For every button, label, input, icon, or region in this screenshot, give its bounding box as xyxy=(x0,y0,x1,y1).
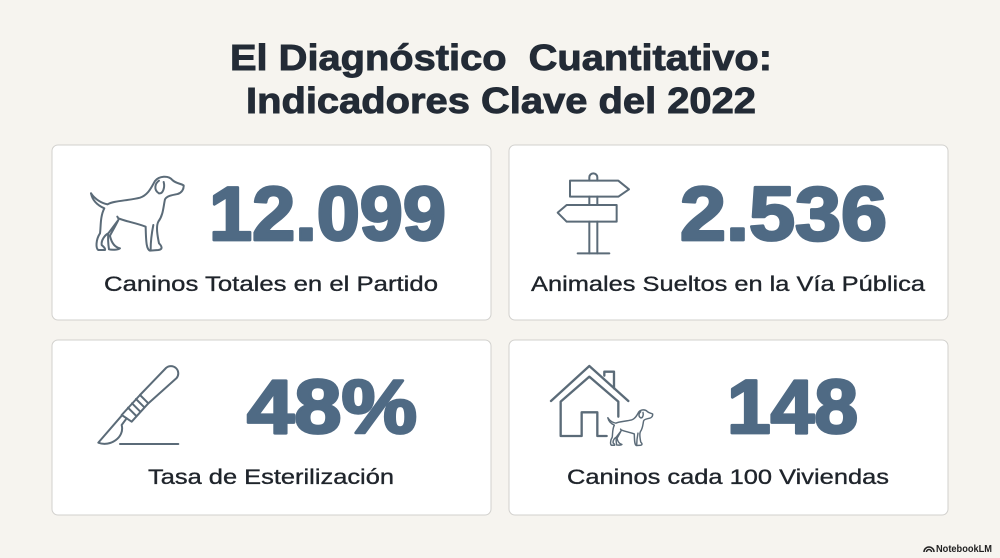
number: 12.099: 12.099 xyxy=(209,172,446,257)
panel: animales sueltos xyxy=(509,145,948,320)
title: El Diagnóstico Cuantitativo: xyxy=(230,37,772,78)
icon: small dog xyxy=(608,410,653,446)
label: Caninos Totales en el Partido xyxy=(104,272,438,296)
icon: dog xyxy=(91,177,184,251)
panel: caninos totales xyxy=(52,145,491,320)
icon: signpost xyxy=(558,173,629,253)
number: 48%: 48% xyxy=(247,365,417,450)
icon: NotebookLM mark xyxy=(924,547,934,552)
logo: NotebookLM: NotebookLM xyxy=(936,543,992,555)
icon: scalpel xyxy=(98,366,178,444)
icon: house with dog xyxy=(551,366,653,446)
title xyxy=(230,37,772,121)
number: 148: 148 xyxy=(727,365,858,450)
panel: tasa de esterilizacion xyxy=(52,340,491,515)
panel: caninos cada 100 viviendas xyxy=(509,340,948,515)
number: 2.536: 2.536 xyxy=(680,172,887,257)
label: Animales Sueltos en la Vía Pública xyxy=(531,272,925,296)
title: Indicadores Clave del 2022 xyxy=(246,80,756,121)
label: Tasa de Esterilización xyxy=(148,465,394,489)
icon: house xyxy=(551,366,628,436)
label: Caninos cada 100 Viviendas xyxy=(567,465,889,489)
